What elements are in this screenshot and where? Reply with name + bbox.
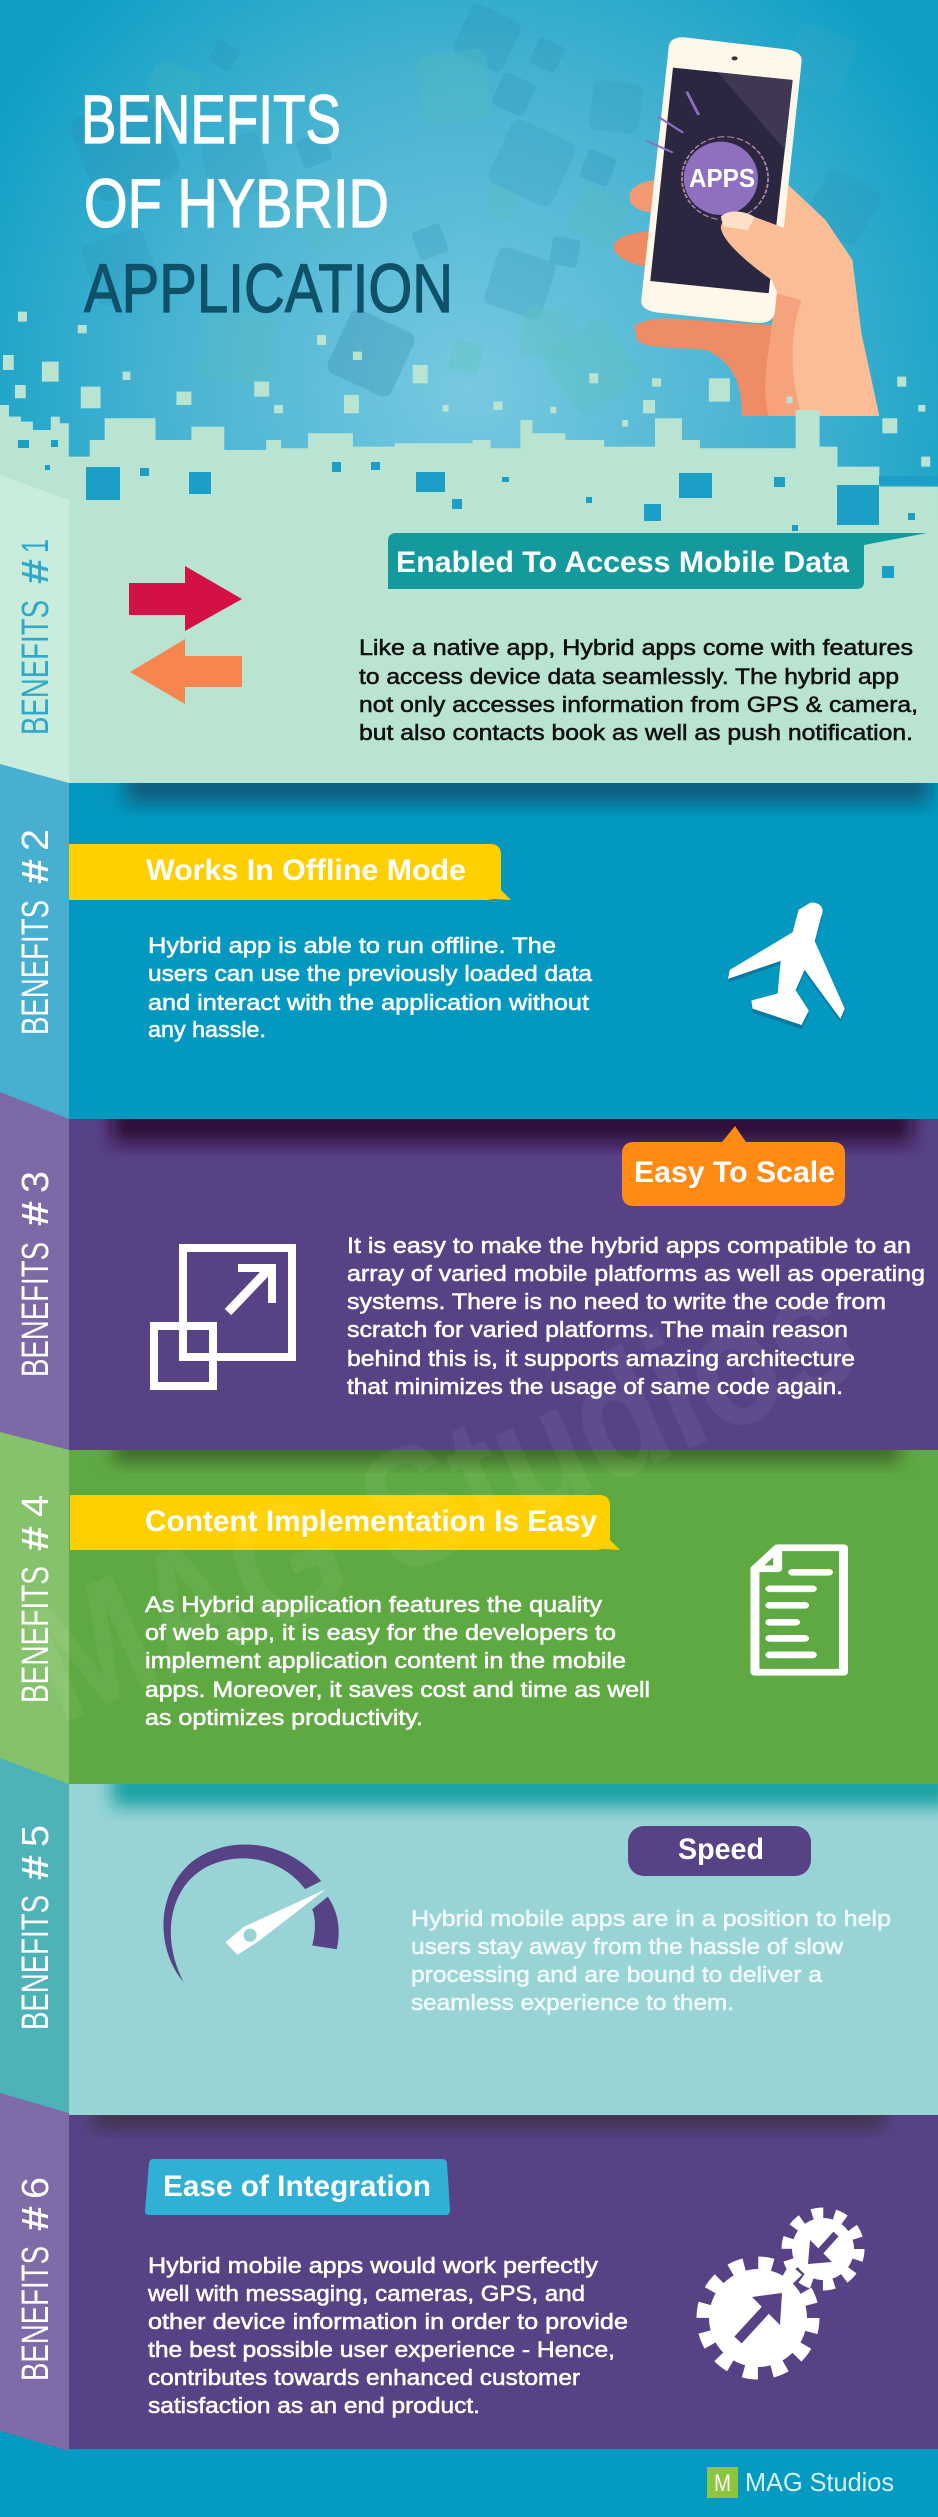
logo: M <box>714 2470 731 2497</box>
body text: behind this is, it supports amazing architecture <box>347 1346 855 1371</box>
body text: seamless experience to them. <box>411 1990 734 2015</box>
body text <box>347 1233 925 1399</box>
icon: red arrow right <box>129 566 242 631</box>
body text: users stay away from the hassle of slow <box>411 1934 843 1959</box>
body text: but also contacts book as well as push notification. <box>359 720 913 745</box>
heading banner: Enabled To Access Mobile Data: Enabled To Access Mobile Data <box>396 546 849 579</box>
panel 1: background <box>0 520 938 784</box>
strip 6: 6 <box>15 2177 57 2199</box>
panel 3 <box>0 1092 938 1450</box>
heading banner: Works In Offline Mode <box>69 844 511 900</box>
body text: It is easy to make the hybrid apps compatible to an <box>347 1233 911 1258</box>
heading banner: Content Implementation Is Easy: Content Implementation Is Easy <box>145 1505 597 1538</box>
body text: the best possible user experience - Hence, <box>148 2337 615 2362</box>
illustration: hand holding phone <box>614 37 879 416</box>
body text: implement application content in the mobile <box>145 1648 626 1673</box>
body text: any hassle. <box>148 1017 266 1042</box>
strip 5: 5 <box>15 1825 57 1847</box>
strip 6 <box>0 2093 69 2451</box>
icon: speedometer <box>163 1845 339 1982</box>
body text <box>359 635 918 745</box>
body text <box>145 1592 650 1730</box>
strip 2: # <box>15 859 57 884</box>
body text: apps. Moreover, it saves cost and time as well <box>145 1677 650 1702</box>
body text: to access device data seamlessly. The hybrid app <box>359 664 899 689</box>
strip 6: BENEFITS <box>15 2246 57 2381</box>
panel 4 <box>0 1432 938 1784</box>
body text: Hybrid app is able to run offline. The <box>148 933 556 958</box>
skyline holes <box>18 440 938 578</box>
strip 1: BENEFITS <box>15 600 57 735</box>
strip 3: 3 <box>15 1171 57 1193</box>
body text: of web app, it is easy for the developers to <box>145 1620 616 1645</box>
body text: systems. There is no need to write the code from <box>347 1289 886 1314</box>
body text <box>148 933 593 1042</box>
icon: scale squares <box>154 1248 292 1386</box>
header background <box>0 0 938 530</box>
panel 5 <box>0 1758 938 2115</box>
strip 1: # <box>15 559 57 584</box>
body text: as optimizes productivity. <box>145 1705 423 1730</box>
body text <box>411 1906 891 2015</box>
strip 4: 4 <box>15 1495 57 1517</box>
title: OF HYBRID <box>84 165 389 242</box>
heading callout: Easy To Scale: Easy To Scale <box>634 1156 835 1189</box>
panel 6 <box>0 2093 938 2451</box>
strip 4 <box>0 1432 69 1784</box>
heading banner: Works In Offline Mode: Works In Offline Mode <box>146 854 466 887</box>
strip 3 <box>0 1092 69 1450</box>
icon: gears <box>705 2214 858 2371</box>
panel 2 <box>0 764 938 1119</box>
strip 4: BENEFITS <box>15 1566 57 1703</box>
icon: document <box>755 1548 843 1672</box>
body text: As Hybrid application features the quality <box>145 1592 602 1617</box>
skyline pixels <box>0 312 938 523</box>
logo: MAG Studios <box>745 2467 894 2497</box>
body text: other device information in order to provide <box>148 2309 628 2334</box>
title <box>81 81 453 327</box>
heading tag: Ease of Integration <box>145 2159 450 2215</box>
body text: that minimizes the usage of same code again. <box>347 1374 843 1399</box>
strip 2: 2 <box>15 829 57 851</box>
body text: and interact with the application without <box>148 990 589 1015</box>
icon: orange arrow left <box>130 639 242 704</box>
body text: users can use the previously loaded data <box>148 961 593 986</box>
strip 2: BENEFITS <box>15 900 57 1035</box>
strip 3: # <box>15 1201 57 1226</box>
title: APPLICATION <box>84 250 453 327</box>
body text: array of varied mobile platforms as well as operating <box>347 1261 925 1286</box>
body text: scratch for varied platforms. The main reason <box>347 1317 848 1342</box>
floating app icons <box>66 1 884 419</box>
strip 4: # <box>15 1526 57 1551</box>
body text: well with messaging, cameras, GPS, and <box>147 2281 585 2306</box>
heading callout: Easy To Scale <box>622 1126 845 1206</box>
illustration: hand holding phone: APPS <box>689 163 755 193</box>
body text: Hybrid mobile apps would work perfectly <box>148 2253 598 2278</box>
strip 2 <box>0 764 69 1119</box>
body text: processing and are bound to deliver a <box>411 1962 823 1987</box>
heading banner: Enabled To Access Mobile Data <box>388 533 927 589</box>
strip 5 <box>0 1758 69 2115</box>
body text: Hybrid mobile apps are in a position to help <box>411 1906 891 1931</box>
heading pill: Speed <box>628 1826 811 1876</box>
body text <box>147 2253 628 2418</box>
heading pill: Speed: Speed <box>678 1833 764 1866</box>
body text: satisfaction as an end product. <box>148 2393 480 2418</box>
strip 3: BENEFITS <box>15 1242 57 1377</box>
heading tag: Ease of Integration: Ease of Integration <box>163 2170 431 2203</box>
body text: not only accesses information from GPS & camera, <box>359 692 918 717</box>
icon: airplane <box>728 902 845 1029</box>
body text: contributes towards enhanced customer <box>148 2365 580 2390</box>
body text: Like a native app, Hybrid apps come with features <box>359 635 913 660</box>
footer <box>0 2431 938 2517</box>
strip 5: BENEFITS <box>15 1895 57 2030</box>
strip 6: # <box>15 2206 57 2231</box>
strip 5: # <box>15 1855 57 1880</box>
panel 1 content <box>129 533 927 745</box>
strip 1 <box>0 475 69 783</box>
strip 1: 1 <box>15 539 57 553</box>
title: BENEFITS <box>81 81 341 158</box>
heading banner: Content Implementation Is Easy <box>70 1495 620 1550</box>
